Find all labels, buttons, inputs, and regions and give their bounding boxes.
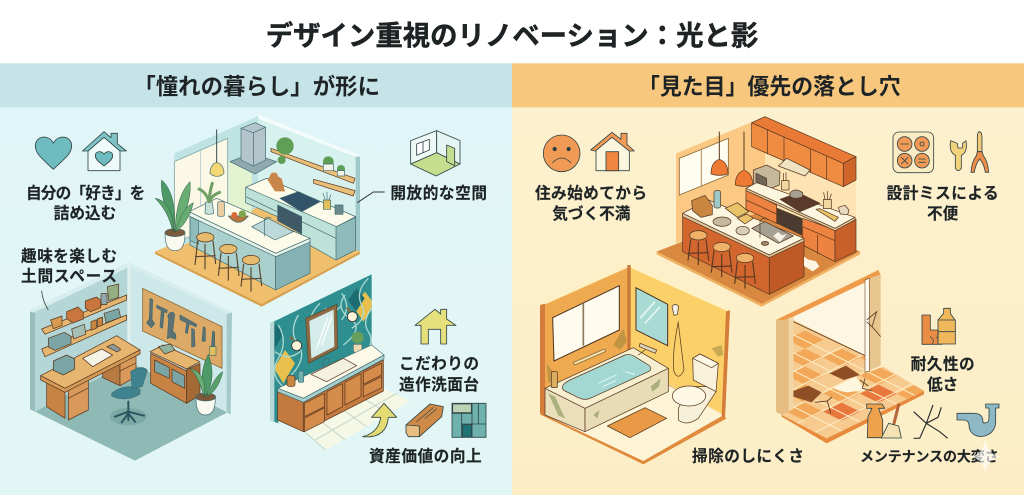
icon: wood [406,404,443,437]
icon: crack [914,405,948,438]
illustration: open kitchen [155,115,360,307]
beam and pillars [776,315,793,415]
text: dissatisfaction [535,183,647,223]
callout line hobby [42,291,48,310]
desk [41,336,140,420]
back counter [746,190,777,223]
icon: pipe [957,404,999,436]
toilet [672,354,718,423]
text: pack in your likes: 詰め込む [54,204,116,222]
icon: cleaning supplies [867,404,901,438]
text: asset value: 資産価値の向上 [369,446,482,465]
icon: sad face [543,135,580,172]
text: pack in your likes: 自分の「好き」を [26,184,145,202]
illustration: vanity [270,274,411,450]
back counter [246,178,356,260]
plant [165,229,185,251]
text: low durability [911,355,975,394]
island [683,216,769,294]
illustration: workshop room [30,262,232,461]
icon: up arrow [363,403,397,437]
panel background [0,63,512,495]
icon: sparkle watermark [970,438,1000,473]
text: low durability: 低さ [927,376,958,394]
text: hobby space: 趣味を楽しむ [21,246,117,265]
panel heading: 「見た目」優先の落とし穴 [638,73,901,99]
icon: open room [411,131,460,176]
text: hobby space: 土間スペース [21,268,117,286]
illustration: bathroom [540,263,730,464]
bathtub [545,388,585,432]
panel heading [0,63,512,107]
stools [195,241,262,292]
illustration: orange kitchen [657,117,860,307]
text: pack in your likes [26,184,145,222]
text: hobby space [21,246,117,286]
text: custom vanity: こだわりの [399,355,479,373]
upper cabinets [752,123,843,187]
panel: dream living [0,63,512,495]
island [190,217,276,290]
icon: pliers [971,132,989,172]
icon: calculator panel [893,132,934,173]
panel background [512,63,1024,495]
stools [688,239,755,289]
mat [607,408,667,438]
icon: wrench [950,141,966,171]
panel: pitfalls [512,63,1024,495]
icon: heart [35,137,72,169]
text: custom vanity [399,355,479,394]
text: low durability: 耐久性の [911,355,975,374]
cabinet [150,344,200,403]
text: design errors [887,184,999,223]
icon: house with heart [82,132,126,171]
text: open space: 開放的な空間 [390,183,487,202]
text: dissatisfaction: 住み始めてから [535,183,647,202]
chair [110,368,147,425]
plant [196,393,216,415]
shelves [42,284,127,357]
panel heading [512,63,1024,107]
text: custom vanity: 造作洗面台 [399,375,479,394]
panel heading: 「憧れの暮らし」が形に [133,73,380,99]
text: design errors: 設計ミスによる [887,184,999,202]
title: デザイン重視のリノベーション：光と影 [266,20,758,51]
icon: durability [922,308,955,344]
illustration: cracked tile floor [776,270,924,444]
text: maintenance: メンテナンスの大変さ [860,448,999,464]
icon: yellow house [415,309,456,344]
callout line [357,192,385,203]
text: dissatisfaction: 気づく不満 [552,204,631,223]
text: hard to clean: 掃除のしにくさ [692,447,804,465]
icon: house with door [591,132,634,171]
icon: tile [452,403,486,437]
text: design errors: 不便 [927,205,959,223]
